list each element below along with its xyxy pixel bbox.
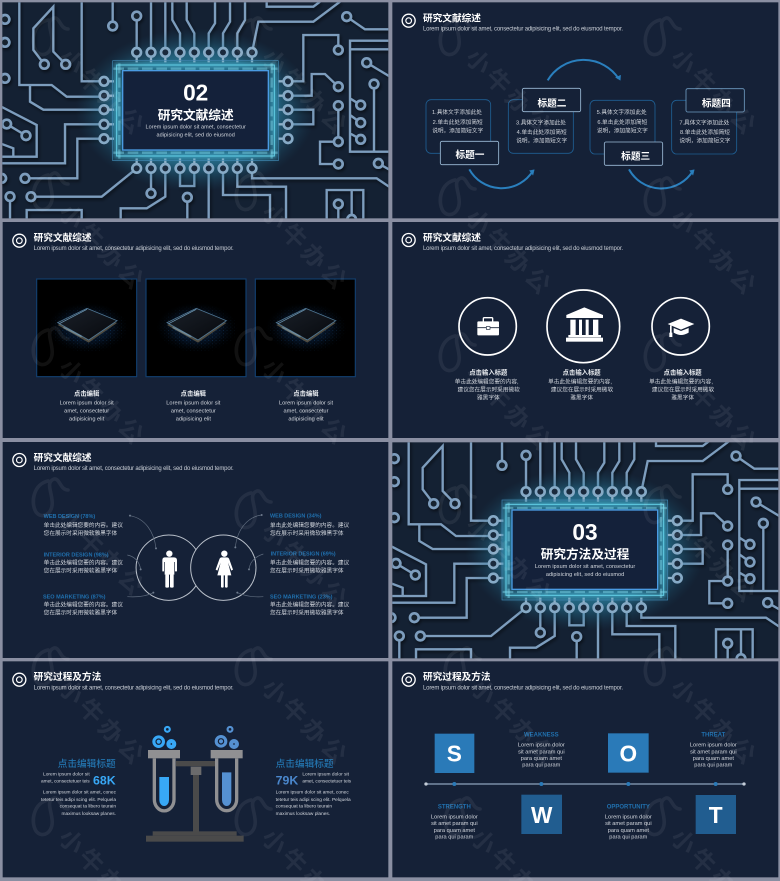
card 2: 标题二 [538,95,567,109]
panel: four titled process cards [392,2,778,218]
card 2: 3.具体文字添加此处 [516,118,566,126]
watermark layer: 小牛办公 [255,39,359,143]
circuit board with glowing chip [0,0,390,224]
connector lines [127,514,263,597]
panel: test tube comparison [3,661,388,877]
square S [435,734,474,773]
left statistic block [41,756,117,817]
right item 1: 您在展示时采用微软雅黑字体 [270,529,344,537]
slide background [392,222,778,438]
card 4: 标题四 [702,95,731,109]
icon: institution building [547,290,620,363]
left item 1 [44,514,123,537]
section description: Lorem ipsum dolor sit amet, consectetur [145,125,246,131]
square T [696,795,736,834]
left statistic block: 点击编辑标题 [58,756,116,770]
item 2 text: 建议您在展示时采用微软 [551,385,613,393]
strength text: para quam amet [434,828,475,834]
icon: briefcase [459,298,516,355]
threat text: para quam amet [693,756,734,762]
slide background 03 [392,442,778,658]
caption 1: 点击编辑 [74,389,100,398]
item 3 text: 单击此处编辑您要的内容, [649,377,713,385]
square O: O [620,740,637,766]
photo 1: microchip [37,279,137,377]
item 3 text: 建议您在展示时采用微软 [652,385,714,393]
square W: W [531,802,553,828]
card 1 [426,100,499,165]
card 3: 说明，添加简短文字 [597,126,648,134]
left statistic block: Lorem ipsum dolor sit [43,771,90,777]
left item 3: 单击此处编辑您要的内容。建议 [44,601,123,609]
right item 1: WEB DESIGN (34%) [270,514,322,520]
header: 研究过程及方法 [423,669,491,683]
right item 3 [270,595,350,617]
section description: adipisicing elit, sed do eiusmod [156,133,235,139]
strength text: sit amet param qui [431,821,478,827]
left item 3 [43,595,123,617]
watermark layer: 小牛办公 [664,355,768,459]
weakness text: sit amet param qui [518,749,565,755]
panel: three chip photos [3,222,388,438]
item 1 text: 雅黑字体 [477,393,500,401]
watermark layer: 小牛办公 [52,349,156,453]
slide background [3,442,388,658]
header: 研究文献综述 [34,450,92,464]
watermark layer: 小牛办公 [459,355,563,459]
threat text: THREAT [701,732,726,738]
left item 3: 您在展示时采用微软雅黑字体 [44,609,118,617]
section description: adipisicing elit, sed do eiusmod [546,572,624,578]
icon: graduation cap [652,298,709,355]
card 3: 标题三 [621,148,650,162]
watermark layer: 小牛办公 [459,39,563,143]
left statistic block: Lorem ipsum dolor sit amet, conec [43,790,117,796]
right item 2: 您在展示时采用微软雅黑字体 [270,566,344,574]
header: 研究文献综述 [423,230,481,244]
section title: 研究方法及过程 [541,544,630,563]
item 1 text: 点击输入标题 [469,367,508,376]
right item 2 [270,552,350,574]
strength text: Lorem ipsum dolor [431,814,478,820]
card 3 [590,100,663,165]
right item 1 [270,514,350,537]
caption 3: amet, consectetur [284,408,329,414]
item 2 text [548,367,613,401]
watermark layer: 小牛办公 [52,39,156,143]
opportunity text: para qui param [609,835,648,841]
square O [608,733,649,773]
left item 2: INTERIOR DESIGN (98%) [44,552,109,558]
card 2: 4.单击此处添加简短 [517,128,567,136]
threat text: sit amet param qui [690,749,737,755]
watermark layer: 小牛办公 [459,199,563,303]
panel: SWOT timeline [392,661,778,877]
slide background [3,661,388,877]
icon: man [162,550,177,588]
watermark layer: 小牛办公 [464,669,568,773]
caption 2: adipisicing elit [176,416,211,422]
section description [145,125,246,139]
header: 研究文献综述 [34,230,92,244]
square S: S [447,741,462,767]
left statistic block: 68K [93,773,116,787]
header: Lorem ipsum dolor sit amet, consectetur adipisicing elit, sed do eiusmod tempor. [423,685,623,691]
header [13,669,234,691]
item 3 text: 点击输入标题 [664,367,702,376]
weakness text: Lorem ipsum dolor [518,742,565,748]
overlapping circles [136,535,256,600]
caption 3: adipisicing elit [288,416,324,422]
left item 1: 单击此处编辑您要的内容。建议 [44,521,123,529]
header: Lorem ipsum dolor sit amet, consectetur adipisicing elit, sed do eiusmod tempor. [423,27,623,33]
caption 3: 点击编辑 [293,389,319,398]
right item 3: 您在展示时采用微软雅黑字体 [270,609,344,617]
right item 3: 单击此处编辑您要的内容。建议 [270,601,350,609]
left statistic block: tetetur teis adipi scing elit. Pelquela [41,797,116,803]
header [13,450,234,472]
photo 2: microchip [146,279,246,377]
watermark layer: 小牛办公 [52,500,156,604]
left item 1: 您在展示时采用微软雅黑字体 [44,529,118,537]
slide background [3,222,388,438]
item 1 text [455,367,520,401]
watermark layer: 小牛办公 [664,507,768,611]
strength text: STRENGTH [438,804,471,810]
section description [535,564,635,578]
threat text: Lorem ipsum dolor [690,742,737,748]
opportunity text: Lorem ipsum dolor [605,814,652,820]
caption 1: adipisicing elit [69,416,105,422]
opportunity text: OPPORTUNITY [607,804,650,810]
card 2: 说明，添加简短文字 [516,136,567,144]
arrow: curve three to four [629,169,694,189]
opportunity text: para quam amet [608,828,649,834]
item 3 text: 雅黑字体 [671,393,694,401]
square W [521,795,562,834]
weakness text: para qui param [522,763,561,769]
header [402,11,623,33]
watermark layer: 小牛办公 [255,512,359,616]
right item 3: SEO MARKETING (23%) [270,595,333,601]
weakness text [518,732,565,769]
opportunity text: sit amet param qui [605,821,652,827]
threat text: para qui param [694,763,733,769]
caption 3 [279,389,333,422]
right statistic block: maximus looksaw planes. [276,811,330,817]
arrow: curve two to three [548,60,621,80]
left statistic block: consequat ta libero teurain [60,804,116,810]
left item 2: 单击此处编辑您要的内容。建议 [44,558,123,566]
timeline [424,782,746,786]
right statistic block: 点击编辑标题 [276,756,334,770]
caption 2: amet, consectetur [171,408,216,414]
caption 2: Lorem ipsum dolor sit [166,400,221,406]
panel: section cover 02 [0,0,390,224]
panel: gender comparison [3,442,388,658]
opportunity text [605,804,652,841]
watermark layer: 小牛办公 [664,39,768,143]
card 1: 说明，添加简短文字 [432,126,483,134]
circuit board with glowing chip [387,439,779,663]
square T: T [709,802,723,828]
card 1: 2.单击此处添加简短 [433,118,483,126]
header: Lorem ipsum dolor sit amet, consectetur adipisicing elit, sed do eiusmod tempor. [423,246,623,252]
watermark layer: 小牛办公 [664,669,768,773]
section description: Lorem ipsum dolor sit amet, consectetur [535,564,635,570]
card 4: 8.单击此处添加简短 [680,128,730,136]
slide background [392,2,778,218]
caption 2 [166,389,221,422]
right item 2: INTERIOR DESIGN (69%) [271,552,336,558]
caption 1: Lorem ipsum dolor sit [60,400,114,406]
card 1: 1.具体文字添加此处 [432,108,482,116]
left item 2: 您在展示时采用微软雅黑字体 [44,566,118,574]
watermark layer: 小牛办公 [52,194,156,298]
right statistic block [276,756,352,817]
card 4: 说明，添加简短文字 [680,136,731,144]
item 2 text: 雅黑字体 [570,393,593,401]
left item 3: SEO MARKETING (87%) [43,595,106,601]
section number: 02 [183,80,208,106]
photo 3: microchip [255,279,355,377]
header [402,669,623,691]
right statistic block: consequat ta libero teurain [276,804,332,810]
header: Lorem ipsum dolor sit amet, consectetur adipisicing elit, sed do eiusmod tempor. [34,466,234,472]
card 4: 7.具体文字添加此处 [679,118,730,126]
left statistic block: amet, consectetuer teis [41,779,90,785]
right item 1: 单击此处编辑您要的内容。建议 [270,521,350,529]
card 4 [672,89,744,154]
header: 研究过程及方法 [34,669,102,683]
section number: 03 [572,519,598,545]
item 2 text: 单击此处编辑您要的内容, [548,377,612,385]
caption 1 [60,389,114,422]
watermark layer: 小牛办公 [255,194,359,298]
slide background [392,661,778,877]
strength text [431,804,478,841]
right statistic block: Lorem ipsum dolor sit amet, conec [276,790,349,796]
header: 研究文献综述 [423,11,481,25]
item 2 text: 点击输入标题 [563,367,601,376]
caption 1: amet, consectetur [64,408,109,414]
threat text [690,732,737,769]
item 1 text: 单击此处编辑您要的内容, [455,377,519,385]
arrow: curve one to two [469,169,534,188]
panel: section cover 03 [387,439,779,663]
strength text: para qui param [435,835,474,841]
right statistic block: tetetur teis adipi scing elit. Pelquela [276,797,351,803]
card 2 [508,88,581,153]
header [402,230,623,252]
right statistic block: amet, consectetuer teis [302,779,352,785]
card 3: 6.单击此处添加简短 [597,118,648,126]
weakness text: para quam amet [521,756,562,762]
weakness text: WEAKNESS [524,732,559,738]
illustration: test tubes on stand [146,726,244,842]
caption 2: 点击编辑 [181,389,207,398]
section title: 研究文献综述 [158,104,234,123]
card 1: 标题一 [456,147,485,161]
left item 2 [44,552,123,574]
item 1 text: 建议您在展示时采用微软 [458,385,520,393]
left statistic block: maximus looksaw planes. [62,811,116,817]
slide background 02 [2,2,388,218]
icon: woman [216,550,233,588]
watermark layer: 小牛办公 [52,669,156,773]
watermark layer: 小牛办公 [255,669,359,773]
caption 3: Lorem ipsum dolor sit [279,400,333,406]
left item 1: WEB DESIGN (78%) [44,514,95,520]
item 3 text [649,367,714,401]
right statistic block: 79K [276,773,298,787]
right statistic block: Lorem ipsum dolor sit [302,771,350,777]
watermark layer: 小牛办公 [255,349,359,453]
right item 2: 单击此处编辑您要的内容。建议 [270,558,350,566]
header: Lorem ipsum dolor sit amet, consectetur adipisicing elit, sed do eiusmod tempor. [34,246,234,252]
watermark layer: 小牛办公 [459,507,563,611]
card 3: 5.具体文字添加此处 [597,108,647,116]
watermark layer: 小牛办公 [664,199,768,303]
header [13,230,234,252]
header: Lorem ipsum dolor sit amet, consectetur adipisicing elit, sed do eiusmod tempor. [34,685,234,691]
panel: three icon circles [392,222,778,438]
